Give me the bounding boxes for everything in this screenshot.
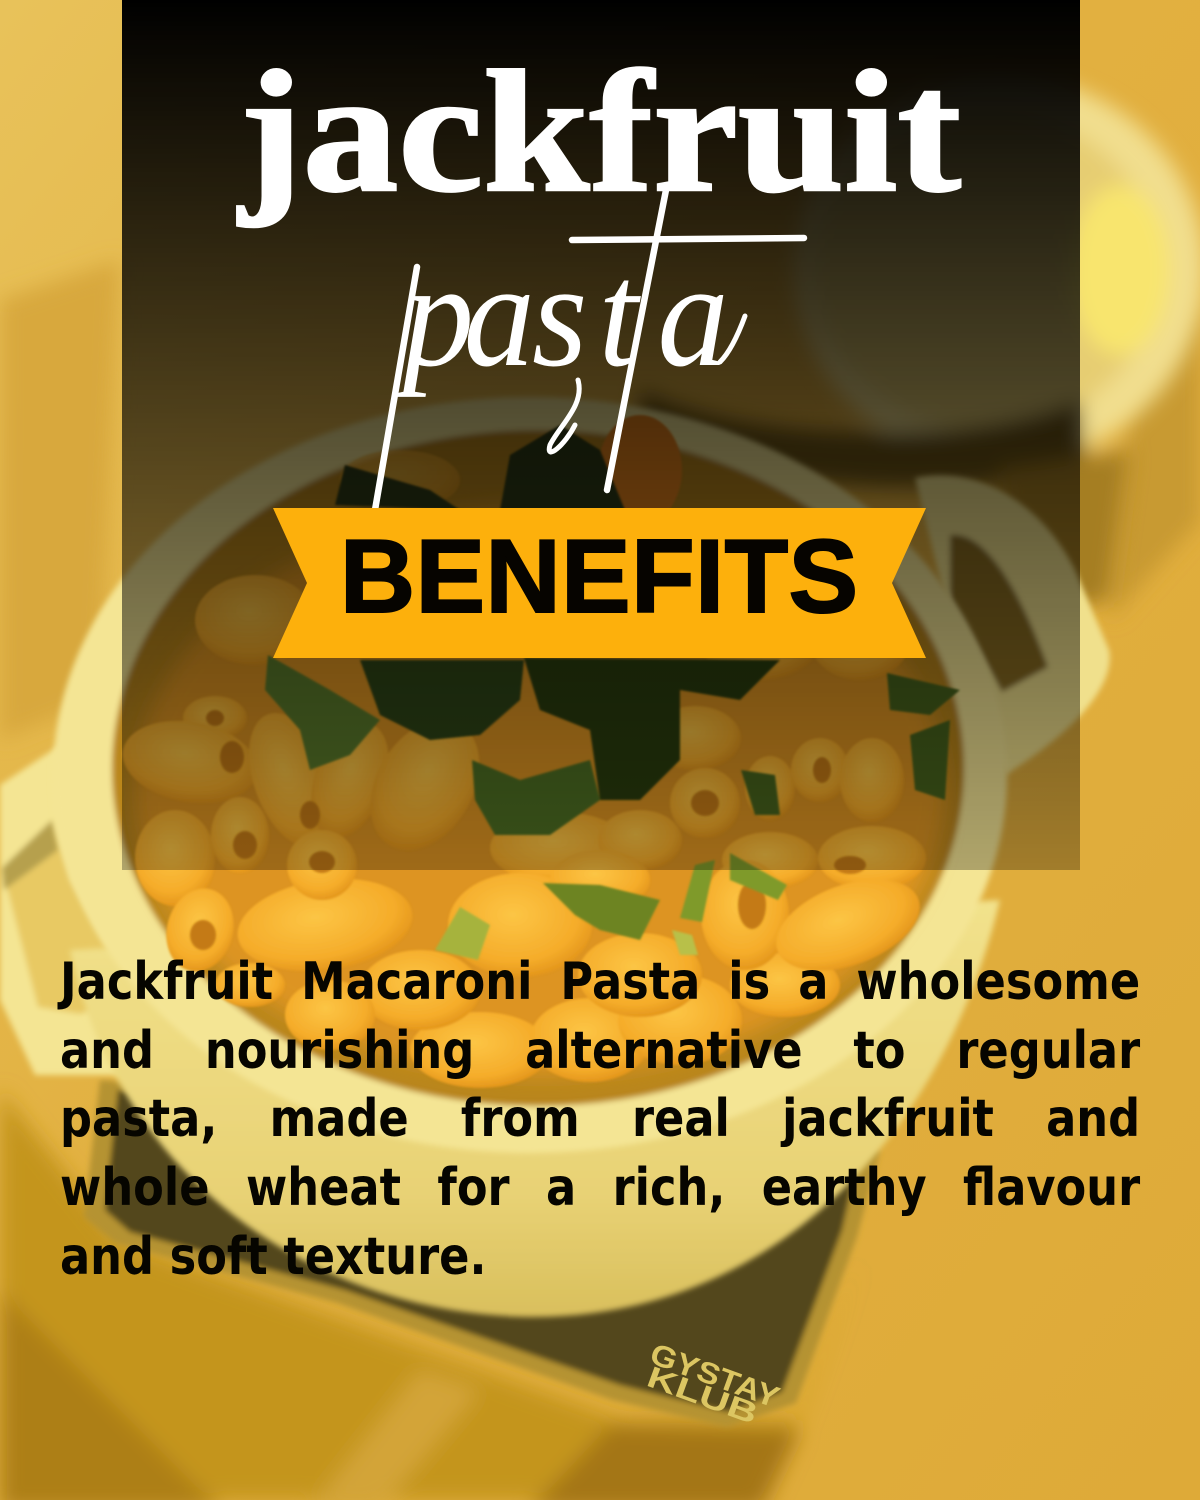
description paragraph: and nourishing alternative to regular [60,1021,1140,1081]
description paragraph: pasta, made from real jackfruit and [60,1089,1140,1149]
coaster logo: GYSTAY [646,1338,784,1415]
bowl body [70,900,1000,1317]
dark title panel [122,0,1080,870]
coaster [84,1080,880,1427]
title: jackfruit: jackfruit [237,35,961,228]
coaster logo: KLUB [643,1361,762,1431]
back bowl [640,75,1200,620]
bowl rim [53,397,1007,1153]
coaster logo [643,1338,784,1431]
title: pasta script: pasta [394,232,729,398]
description paragraph: whole wheat for a rich, earthy flavour [60,1158,1140,1218]
ribbon banner [273,508,926,658]
title: pasta script [375,190,804,510]
cilantro garnish [265,425,960,960]
pasta [135,505,945,1075]
description paragraph [58,952,1140,1287]
bowl handles [0,475,1110,1075]
macaroni pieces [116,415,932,1088]
macaroni holes [190,710,866,950]
description paragraph: Jackfruit Macaroni Pasta is a wholesome [60,952,1140,1012]
description paragraph: and soft texture. [60,1227,486,1287]
banner label: BENEFITS [340,519,858,635]
